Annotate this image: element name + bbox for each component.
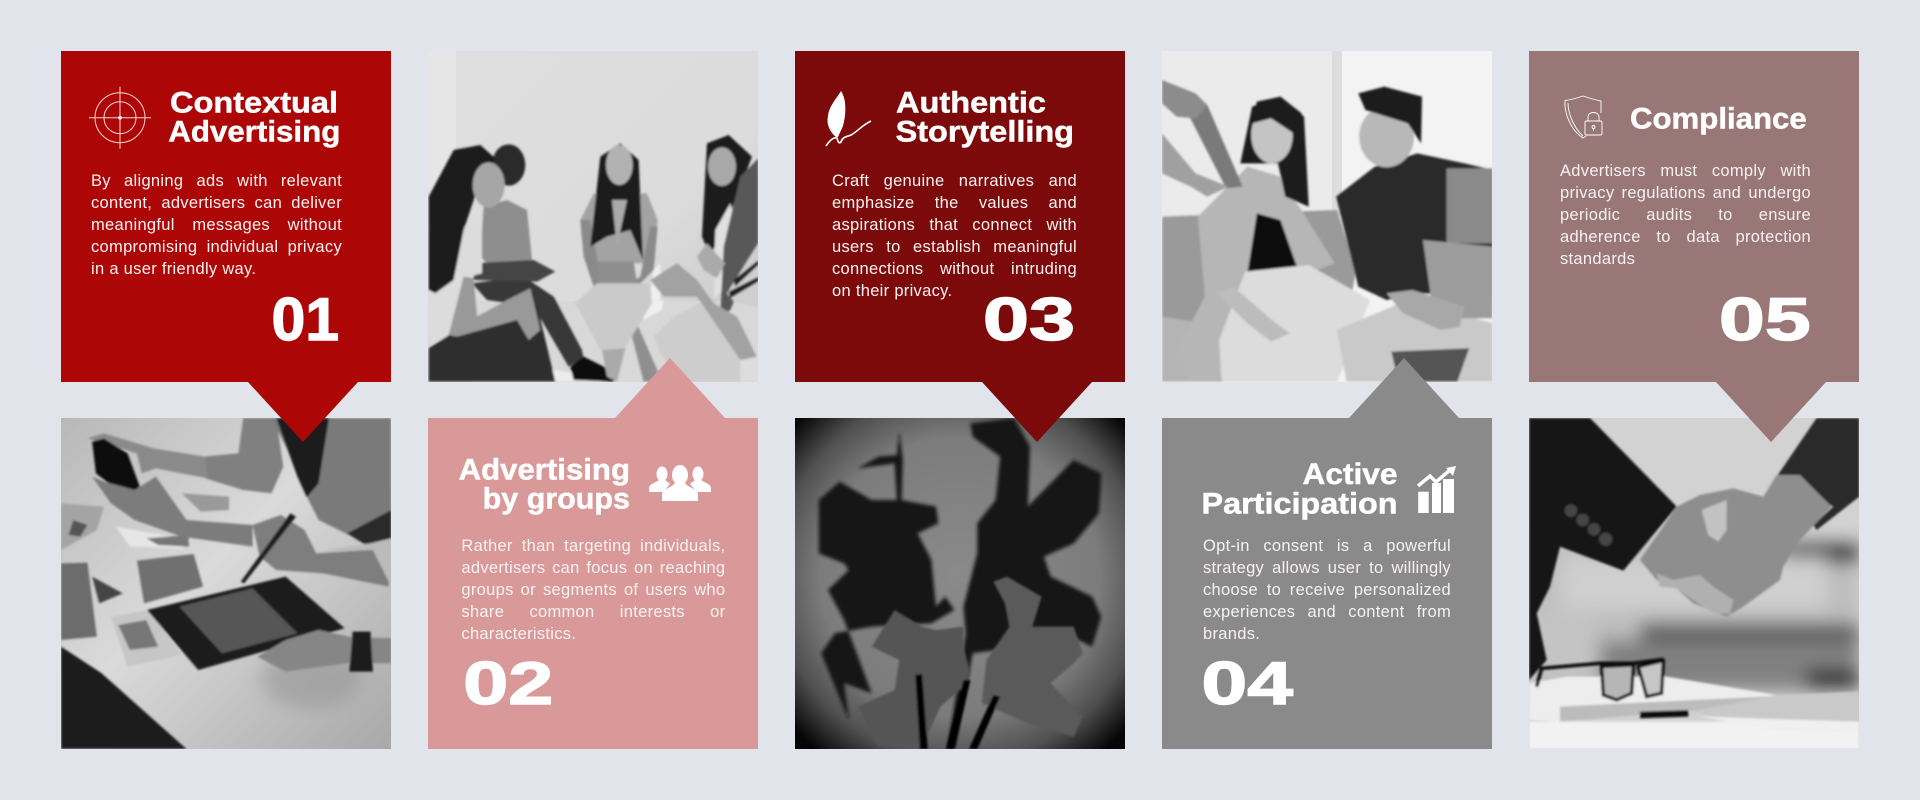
body text [832,174,1076,300]
body text [1560,164,1810,264]
body text [92,174,342,278]
body text: share common interests or [461,603,725,621]
body text: in a user friendly way. [91,260,256,278]
body text: connections without intruding [832,260,1077,278]
panel: active participation [1162,358,1492,749]
body text: experiences and content from [1203,603,1451,621]
panel: advertising by groups [428,358,758,749]
body text: periodic audits to ensure [1560,206,1811,224]
body text: users to establish meaningful [832,238,1077,256]
body text: Rather than targeting individuals, [461,537,725,555]
heading: Compliance: Compliance [1630,102,1807,135]
photo: handshake above glasses and notebook [1529,418,1859,749]
body text: strategy allows user to willingly [1203,559,1451,577]
body text: on their privacy. [832,282,952,300]
photo: couple receiving a delivery on a sofa [1162,51,1492,382]
heading: Authentic Storytelling: Authentic [896,87,1046,120]
photo: shadow puppets of a knight and dragon [795,418,1125,749]
heading: Contextual Advertising: Advertising [168,116,340,149]
heading: Advertising by groups: Advertising [459,453,630,486]
heading: Contextual Advertising: Contextual [170,87,338,120]
icon: target crosshair [89,86,151,149]
icon: group of people [649,465,711,501]
body text: content, advertisers can deliver [91,194,342,212]
body text [462,539,725,639]
body text: Opt-in consent is a powerful [1203,537,1451,555]
body text: privacy regulations and undergo [1560,184,1811,202]
body text: aspirations that connect with [832,216,1077,234]
number 01: 01 [272,286,339,353]
number 04: 04 [1202,650,1294,717]
body text: meaningful messages without [91,216,342,234]
body text: compromising individual privacy [91,238,342,256]
heading: Active Participation: Active [1302,458,1398,491]
body text: groups or segments of users who [461,581,725,599]
icon: shield with padlock [1564,96,1602,138]
body text: Craft genuine narratives and [832,172,1077,190]
heading: Advertising by groups: by groups [483,482,630,515]
photo: group of women talking in a circle [428,51,758,382]
icon: rising bar chart [1417,466,1456,513]
body text: By aligning ads with relevant [91,172,342,190]
heading: Authentic Storytelling [896,90,1072,148]
heading: Contextual Advertising [168,90,338,148]
number 05: 05 [1719,286,1811,353]
body text: adherence to data protection [1560,228,1811,246]
body text [1204,539,1450,639]
panel: authentic storytelling [795,51,1125,442]
body text: choose to receive personalized [1203,581,1451,599]
number 03: 03 [983,286,1075,353]
heading: Advertising by groups [459,458,629,515]
number 02: 02 [463,650,553,717]
body text: advertisers can focus on reaching [461,559,725,577]
panel: contextual advertising [61,51,391,442]
heading: Active Participation [1203,462,1397,520]
heading: Authentic Storytelling: Storytelling [896,116,1074,149]
body text: Advertisers must comply with [1560,162,1811,180]
body text: standards [1560,250,1635,268]
icon: feather quill [825,91,872,146]
body text: brands. [1203,625,1260,643]
heading: Active Participation: Participation [1202,487,1398,520]
body text: characteristics. [461,625,576,643]
body text: emphasize the values and [832,194,1077,212]
photo: designers reviewing images on a tablet [61,418,391,749]
panel: compliance [1529,51,1859,442]
